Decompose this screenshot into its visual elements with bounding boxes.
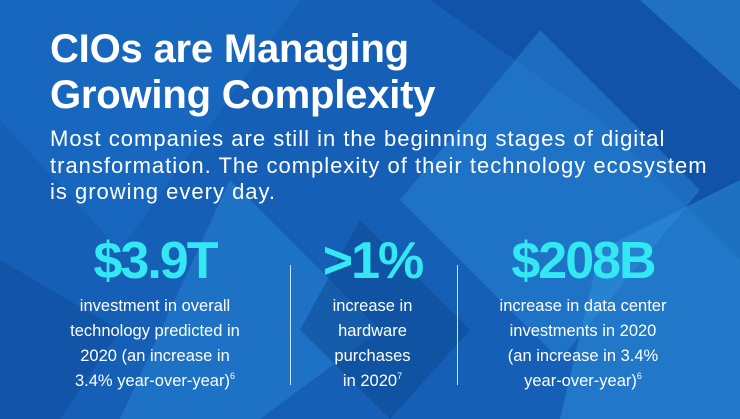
- stat: 3.9T: [70, 232, 240, 390]
- stat: 208B: $208B: [511, 232, 655, 290]
- stat: 208B: investments in 2020: [510, 322, 656, 340]
- stat: 208B: (an increase in 3.4%: [508, 347, 658, 365]
- title: Growing Complexity: [50, 73, 435, 117]
- stat: >1%: increase in: [333, 297, 412, 315]
- stat: 208B: increase in data center: [500, 297, 666, 315]
- stat: >1%: hardware: [338, 322, 407, 340]
- stat: 3.9T: $3.9T: [94, 232, 216, 290]
- divider 1: [290, 265, 291, 385]
- subtitle: is growing every day.: [50, 179, 276, 204]
- stat: 3.9T: 3.4% year-over-year)6: [75, 371, 235, 390]
- subtitle: Most companies are still in the beginning stages of digital: [50, 126, 665, 151]
- title: CIOs are Managing: [50, 27, 409, 71]
- subtitle: transformation. The complexity of their technology ecosystem: [50, 152, 708, 178]
- stat: 3.9T: 2020 (an increase in: [80, 347, 230, 365]
- stat: 208B: [500, 232, 666, 390]
- stat: >1%: purchases: [334, 347, 411, 365]
- stat: >1%: >1%: [323, 232, 422, 290]
- stat: 3.9T: investment in overall: [80, 297, 230, 315]
- subtitle: [50, 126, 708, 204]
- divider 2: [457, 265, 458, 385]
- stat: >1%: [323, 232, 423, 390]
- stat: 208B: year-over-year)6: [524, 371, 642, 390]
- title: [50, 27, 436, 117]
- stat: 3.9T: technology predicted in: [70, 322, 240, 340]
- stat: >1%: in 20207: [343, 371, 402, 390]
